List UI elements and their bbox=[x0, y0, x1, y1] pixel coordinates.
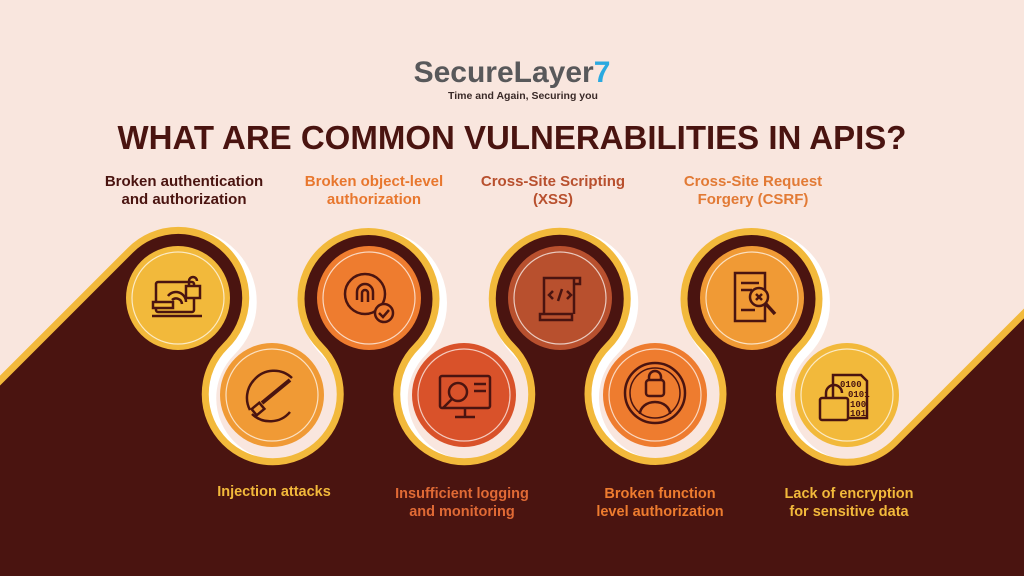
icon disc 8: lack of encryption bbox=[795, 343, 899, 447]
dark band bbox=[0, 230, 1024, 576]
label: XSS bbox=[481, 173, 625, 208]
logo: SecureLayer7 bbox=[414, 56, 610, 89]
icon disc 3: broken object-level authorization bbox=[317, 246, 421, 350]
label: logging: Insufficient logging bbox=[395, 486, 529, 502]
icon disc 2: injection attacks bbox=[220, 343, 324, 447]
label: encryption bbox=[785, 486, 913, 520]
icon disc 8: lack of encryption: 0100 bbox=[840, 380, 862, 390]
label: XSS: Cross-Site Scripting bbox=[481, 173, 625, 190]
label: broken authentication: and authorization bbox=[122, 191, 246, 208]
icon disc 7: CSRF bbox=[700, 246, 804, 350]
icon disc 8: lack of encryption: 101 bbox=[850, 409, 867, 419]
title: WHAT ARE COMMON VULNERABILITIES IN APIS? bbox=[118, 119, 906, 156]
icon disc 8: lack of encryption: 0101 bbox=[848, 390, 870, 400]
label: broken authentication: Broken authentication bbox=[105, 173, 263, 190]
label: logging: and monitoring bbox=[409, 504, 515, 520]
label: broken object-level bbox=[305, 173, 443, 208]
label: encryption: Lack of encryption bbox=[785, 486, 913, 502]
label: broken object-level: Broken object-level bbox=[305, 173, 443, 190]
tagline: Time and Again, Securing you bbox=[448, 90, 598, 102]
label: broken function: Broken function bbox=[604, 486, 716, 502]
label: injection: Injection attacks bbox=[217, 484, 331, 500]
icon disc 1: broken authentication bbox=[126, 246, 230, 350]
label: CSRF: Forgery (CSRF) bbox=[698, 191, 808, 208]
icon disc 8: lack of encryption: 100 bbox=[850, 400, 866, 410]
label: broken object-level: authorization bbox=[327, 191, 421, 208]
icon disc 4: insufficient logging bbox=[412, 343, 516, 447]
label: broken function: level authorization bbox=[596, 504, 724, 520]
label: XSS: (XSS) bbox=[533, 191, 573, 208]
label: broken authentication bbox=[105, 173, 263, 208]
label: broken function bbox=[596, 486, 724, 520]
icon disc 5: XSS bbox=[508, 246, 612, 350]
label: CSRF bbox=[684, 173, 822, 208]
label: encryption: for sensitive data bbox=[789, 504, 909, 520]
label: CSRF: Cross-Site Request bbox=[684, 173, 822, 190]
label: logging bbox=[395, 486, 529, 520]
icon disc 6: broken function level bbox=[603, 343, 707, 447]
